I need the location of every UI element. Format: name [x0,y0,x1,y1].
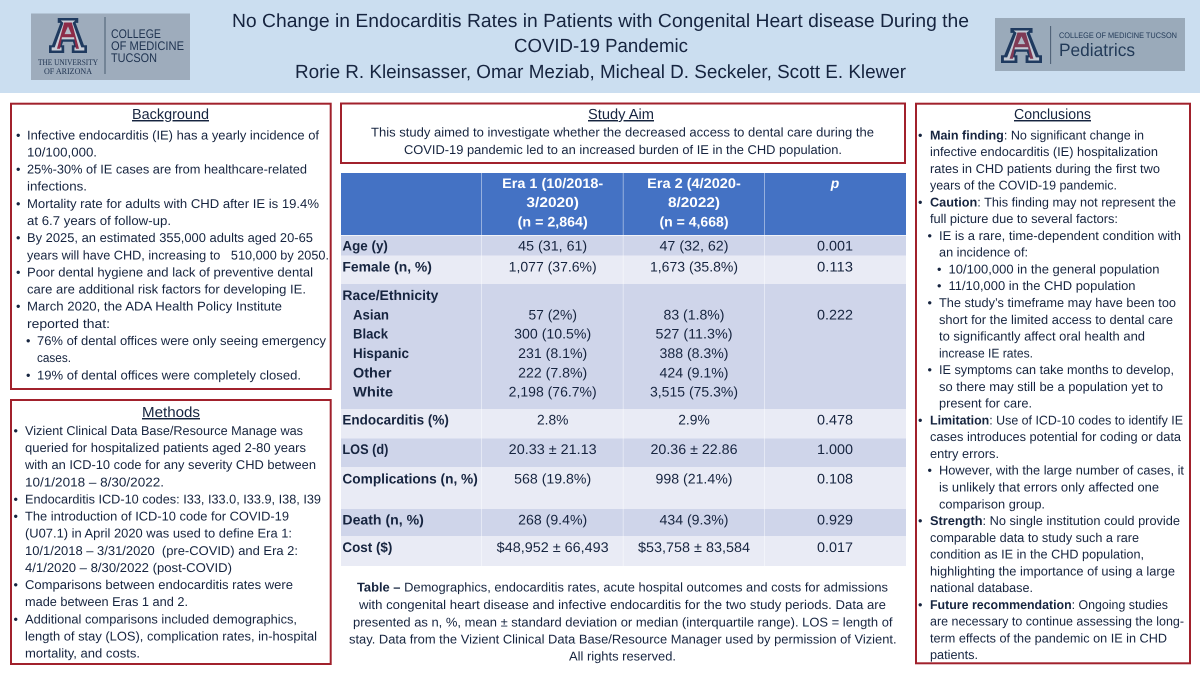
bullet list: conclusions: • [937,279,941,293]
bullet list: conclusions: so there may still be a population yet to [939,380,1163,394]
bullet list: conclusions: • [918,128,922,142]
bullet list: background: Infective endocarditis (IE) has a yearly incidence of [27,128,319,142]
column: era 2 values: 424 (9.1%) [660,364,728,380]
bullet list: background: March 2020, the ADA Health Policy Institute [27,300,282,314]
bullet list: methods: Comparisons between endocarditis rates were [25,578,293,592]
table backgrounds [341,173,906,566]
column: era 2 values: $53,758 ± 83,584 [638,539,750,555]
table header row: p [830,175,840,191]
bullet list: methods: • [14,612,18,626]
table header row [502,175,840,230]
row labels: Asian [353,306,389,322]
bullet list: background: • [16,265,20,279]
bullet list: conclusions: cases introduces potential for coding or data [930,430,1182,444]
column: p values: 0.929 [817,512,853,528]
bullet list: methods: made between Eras 1 and 2. [25,595,188,609]
bullet list: background: 76% of dental offices were only seeing emergency [37,334,327,348]
bullet list: methods: • [14,578,18,592]
table caption: with congenital heart disease and infective endocarditis for the two study periods. Data are [358,598,886,612]
column: p values: 0.222 [817,306,853,322]
column: era 1 values: 268 (9.4%) [518,512,587,528]
bullet list: background: 25%-30% of IE cases are from healthcare-related [27,163,307,177]
bullet list: methods: 10/1/2018 – 8/30/2022. [25,475,164,489]
logo: College of Medicine Tucson: OF MEDICINE [111,39,184,53]
row labels: Hispanic [353,345,409,361]
bullet list: background: • [16,231,20,245]
column: era 1 values: 300 (10.5%) [514,326,591,342]
row labels: LOS (d) [342,441,388,457]
title [232,11,969,83]
bullet list: conclusions: Main finding: No significant change in [930,128,1144,142]
bullet list: conclusions: • [918,195,922,209]
bullet list: conclusions: • [928,296,932,310]
bullet list: conclusions: • [918,413,922,427]
column: p values: 1.000 [817,441,853,457]
bullet list: conclusions: The study’s timeframe may have been too [939,296,1176,310]
column: era 1 values: 20.33 ± 21.13 [509,441,597,457]
table header row: (n = 2,864) [518,214,588,230]
row labels: Other [353,364,392,380]
bullet list: conclusions: Caution: This finding may not represent the [930,195,1176,209]
bullet list: conclusions: to significantly affect oral health and [939,330,1145,344]
bullet list: methods: The introduction of ICD-10 code for COVID-19 [25,510,289,524]
logo: Pediatrics: Pediatrics [1059,40,1135,60]
column: era 2 values: 434 (9.3%) [660,512,728,528]
bullet list: background [16,128,329,382]
row labels: Cost ($) [342,539,392,555]
column: era 2 values: 527 (11.3%) [656,326,732,342]
title: COVID-19 Pandemic [514,36,688,57]
panel: background [11,104,331,389]
heading: conclusions: Conclusions [1014,107,1091,123]
bullet list: conclusions: IE symptoms can take months to develop, [939,363,1174,377]
bullet list: methods: • [14,510,18,524]
column: era 1 values [497,238,609,555]
logo: Pediatrics: COLLEGE OF MEDICINE TUCSON [1059,31,1177,40]
table: demographics and outcomes [341,173,906,566]
icon: block A [1001,28,1042,63]
bullet list: conclusions: Limitation: Use of ICD-10 codes to identify IE [930,413,1183,427]
bullet list: background: • [16,163,20,177]
table caption: stay. Data from the Vizient Clinical Data Base/Resource Manager used by permission of Vizient. [349,632,897,646]
bullet list: methods: with an ICD-10 code for any severity CHD between [24,458,316,472]
study aim text [371,126,874,157]
table caption: All rights reserved. [569,649,676,663]
bullet list: conclusions: highlighting the importance of using a large [930,564,1175,578]
bullet list: background: • [16,300,20,314]
column: era 2 values: 83 (1.8%) [664,306,724,322]
column: era 1 values: 568 (19.8%) [514,470,591,486]
bullet list: conclusions: • [928,363,932,377]
column: era 2 values: 3,515 (75.3%) [650,384,738,400]
bullet list: conclusions: • [918,514,922,528]
row labels: White [353,384,393,400]
table header row: 8/2022) [668,194,720,210]
bullet list: conclusions: infective endocarditis (IE) hospitalization [930,145,1158,159]
bullet list: background: reported that: [27,317,110,331]
logo: College of Medicine Tucson: OF ARIZONA [44,66,93,76]
bullet list: conclusions: present for care. [939,397,1032,411]
bullet list: background: cases. [37,351,71,365]
bullet list: conclusions: is unlikely that errors only affected one [939,480,1159,494]
panel: study aim [341,104,905,163]
bullet list: background: 19% of dental offices were completely closed. [37,368,301,382]
bullet list: conclusions: years of the COVID-19 pandemic. [930,179,1117,193]
logo: College of Medicine Tucson: COLLEGE [111,27,161,41]
bullet list: conclusions: comparable data to study such a rare [930,531,1139,545]
bullet list: conclusions: are necessary to continue assessing the long- [930,615,1184,629]
bullet list: methods: Additional comparisons included demographics, [25,612,297,626]
table header row: Era 1 (10/2018- [502,175,604,191]
bullet list: conclusions: comparison group. [939,497,1045,511]
row labels: Endocarditis (%) [342,412,449,428]
bullet list: conclusions: an incidence of: [939,246,1028,260]
bullet list: methods: length of stay (LOS), complication rates, in-hospital [25,629,317,643]
bullet list: conclusions: Strength: No single institution could provide [930,514,1180,528]
row labels: Race/Ethnicity [342,287,439,303]
column: era 1 values: 2,198 (76.7%) [509,384,597,400]
bullet list: background: care are additional risk factors for developing IE. [27,283,306,297]
column: era 1 values: 222 (7.8%) [518,364,587,380]
bullet list: background: • [26,334,30,348]
column: era 1 values: 57 (2%) [528,306,577,322]
bullet list: methods [14,424,321,660]
column: p values: 0.478 [817,412,853,428]
table header row: Era 2 (4/2020- [647,175,741,191]
bullet list: methods: • [14,424,18,438]
table caption: Table – Demographics, endocarditis rates, acute hospital outcomes and costs for admissions [357,581,888,595]
column: p values [817,238,853,555]
bullet list: background: • [26,368,30,382]
title: No Change in Endocarditis Rates in Patients with Congenital Heart disease During the [232,11,969,32]
table caption [349,581,897,663]
row labels: Death (n, %) [342,512,424,528]
bullet list: conclusions: 10/100,000 in the general population [948,262,1160,276]
table caption: presented as n, %, mean ± standard deviation or median (interquartile range). LOS = length of [353,615,893,629]
bullet list: methods: Vizient Clinical Data Base/Resource Manage was [25,424,303,438]
bullet list: conclusions: rates in CHD patients during the first two [930,162,1160,176]
bullet list: conclusions: entry errors. [930,447,999,461]
bullet list: background: 10/100,000. [27,145,97,159]
column: era 2 values: 998 (21.4%) [656,470,732,486]
column: era 2 values [638,238,750,555]
authors: Rorie R. Kleinsasser, Omar Meziab, Micheal D. Seckeler, Scott E. Klewer [295,62,907,83]
bullet list: conclusions: However, with the large number of cases, it [939,464,1184,478]
bullet list: conclusions: condition as IE in the CHD population, [930,548,1144,562]
logo: College of Medicine Tucson [31,14,190,80]
panel: methods [11,400,331,664]
table header row: (n = 4,668) [660,214,728,230]
bullet list: conclusions: short for the limited access to dental care [939,313,1173,327]
bullet list: background: years will have CHD, increasing to 510,000 by 2050. [27,248,329,262]
bullet list: background: Poor dental hygiene and lack of preventive dental [27,265,313,279]
column: p values: 0.108 [817,470,853,486]
bullet list: conclusions: full picture due to several factors: [930,212,1118,226]
bullet list: conclusions [918,128,1184,662]
panel: conclusions [916,104,1190,663]
bullet list: background: infections. [27,180,87,194]
column: p values: 0.017 [817,539,853,555]
column: era 1 values: 231 (8.1%) [518,345,587,361]
bullet list: methods: (U07.1) in April 2020 was used to define Era 1: [25,527,292,541]
row labels: Complications (n, %) [342,470,478,486]
column: era 1 values: 45 (31, 61) [518,238,587,254]
bullet list: background: • [16,128,20,142]
bullet list: methods: 10/1/2018 – 3/31/2020 (pre-COVID) and Era 2: [25,544,298,558]
bullet list: conclusions: national database. [930,581,1033,595]
study aim text: This study aimed to investigate whether the decreased access to dental care during the [371,126,874,140]
column: era 1 values: 2.8% [537,412,568,428]
heading: methods: Methods [142,405,200,421]
bullet list: conclusions: increase IE rates. [939,346,1033,360]
bullet list: background: at 6.7 years of follow-up. [27,214,171,228]
study aim text: COVID-19 pandemic led to an increased burden of IE in the CHD population. [404,143,842,157]
bullet list: background: By 2025, an estimated 355,000 adults aged 20-65 [27,231,313,245]
bullet list: methods: • [14,492,18,506]
column: p values: 0.113 [817,258,853,274]
column: era 1 values: 1,077 (37.6%) [509,258,597,274]
logo: College of Medicine Tucson: THE UNIVERSITY [38,57,98,67]
heading: study aim: Study Aim [588,107,654,123]
bullet list: methods: mortality, and costs. [25,646,140,660]
heading: background: Background [132,107,209,123]
bullet list: conclusions: • [918,598,922,612]
row labels [342,238,478,555]
bullet list: conclusions: 11/10,000 in the CHD population [948,279,1136,293]
column: era 2 values: 20.36 ± 22.86 [650,441,738,457]
bullet list: conclusions: • [928,464,932,478]
bullet list: conclusions: term effects of the pandemic on IE in CHD [930,631,1167,645]
row labels: Black [353,326,388,342]
column: era 2 values: 47 (32, 62) [660,238,728,254]
bullet list: background: • [16,197,20,211]
column: era 2 values: 388 (8.3%) [660,345,728,361]
bullet list: conclusions: • [937,262,941,276]
bullet list: conclusions: IE is a rare, time-dependent condition with [939,229,1181,243]
bullet list: methods: Endocarditis ICD-10 codes: I33, I33.0, I33.9, I38, I39 [25,492,321,506]
bullet list: methods: queried for hospitalized patients aged 2-80 years [25,441,306,455]
column: p values: 0.001 [817,238,853,254]
row labels: Age (y) [342,238,388,254]
logo: Pediatrics [995,18,1185,71]
logo: College of Medicine Tucson: TUCSON [111,51,157,65]
bullet list: conclusions: • [928,229,932,243]
bullet list: conclusions: Future recommendation: Ongoing studies [930,598,1168,612]
table header row: 3/2020) [526,194,579,210]
icon: block A [49,18,87,53]
bullet list: conclusions: patients. [930,648,978,662]
bullet list: methods: 4/1/2020 – 8/30/2022 (post-COVID) [25,561,232,575]
row labels: Female (n, %) [342,258,432,274]
column: era 2 values: 2.9% [678,412,710,428]
column: era 2 values: 1,673 (35.8%) [650,258,738,274]
bullet list: background: Mortality rate for adults with CHD after IE is 19.4% [27,197,319,211]
column: era 1 values: $48,952 ± 66,493 [497,539,609,555]
header band [0,0,1200,93]
